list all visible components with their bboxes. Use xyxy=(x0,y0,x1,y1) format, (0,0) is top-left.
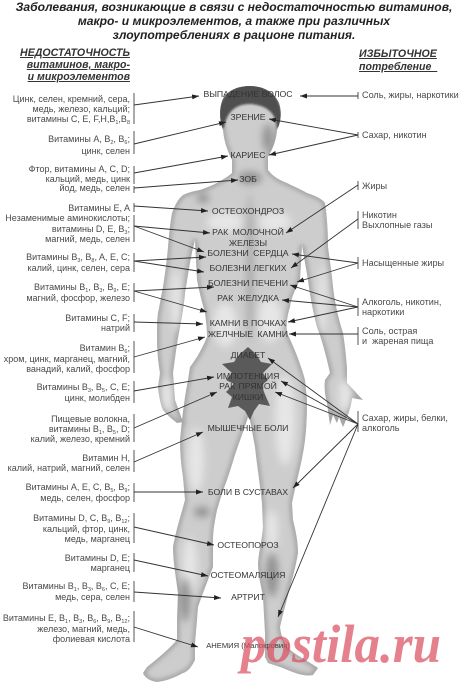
deficiency list: impotence: цинк, молибден xyxy=(65,393,130,403)
left bracket bars xyxy=(133,93,135,642)
disease labels on body: ЖЕЛЕЗЫ xyxy=(229,238,267,248)
disease labels on body: БОЛЕЗНИ СЕРДЦА xyxy=(207,248,289,258)
deficiency list: kidney stones: натрий xyxy=(101,323,130,333)
heading: deficiency: и микроэлементов xyxy=(28,71,130,83)
title: Заболевания, возникающие в связи с недостаточностью витаминов, xyxy=(16,0,452,14)
deficiency list: diabetes xyxy=(4,343,130,374)
deficiency list: vision: Витамины A, B2, B6; xyxy=(48,134,130,146)
deficiency list: arthritis: Витамины B1, B3, B6, C, E; xyxy=(23,581,130,593)
deficiency list: heart and lungs: калий, цинк, селен, сера xyxy=(28,263,130,273)
deficiency list: joints xyxy=(26,482,130,503)
deficiency list: arthritis xyxy=(23,581,130,602)
deficiency list: teeth and thyroid: кальций, медь, цинк xyxy=(46,174,130,184)
deficiency list: vision xyxy=(48,134,130,156)
arrows from deficiency column xyxy=(134,96,238,647)
excess list: nicotine and exhaust: Выхлопные газы xyxy=(362,220,432,230)
deficiency list: anemia: фолиевая кислота xyxy=(53,634,130,644)
disease labels on body: ОСТЕОХОНДРОЗ xyxy=(212,206,284,216)
deficiency list: hair: витамины C, E, F,H,B1,B8 xyxy=(27,114,130,126)
disease labels on body: БОЛЕЗНИ ПЕЧЕНИ xyxy=(208,278,288,288)
disease labels on body: БОЛЕЗНИ ЛЕГКИХ xyxy=(209,263,287,273)
deficiency list: liver: магний, фосфор, железо xyxy=(26,293,130,303)
disease labels on body: ИМПОТЕНЦИЯ xyxy=(217,371,279,381)
disease labels on body: ДИАБЕТ xyxy=(231,350,265,360)
disease labels on body: КАМНИ В ПОЧКАХ xyxy=(210,318,286,328)
disease labels on body: РАК ЖЕЛУДКА xyxy=(217,293,279,303)
deficiency list: muscle pain: калий, натрий, магний, селен xyxy=(8,463,130,473)
deficiency list: osteomalacia xyxy=(65,553,130,573)
deficiency list: osteoporosis: медь, марганец xyxy=(65,534,130,544)
excess list: salt and fried food xyxy=(362,326,434,346)
deficiency list: diabetes: Витамин B6; xyxy=(80,343,130,355)
deficiency list: muscle pain xyxy=(8,453,130,473)
hair xyxy=(217,84,282,128)
excess list: fats: Жиры xyxy=(362,181,387,191)
watermark: postila.ru xyxy=(237,614,441,674)
disease labels on body: РАК ПРЯМОЙ xyxy=(219,381,277,391)
excess list: sugar and nicotine: Сахар, никотин xyxy=(362,130,427,140)
deficiency list: anemia: железо, магний, медь, xyxy=(37,624,130,634)
heading: deficiency xyxy=(20,47,130,83)
disease labels on body: ВЫПАДЕНИЕ ВОЛОС xyxy=(203,89,293,99)
deficiency list: colon: витамины B1, B5, D; xyxy=(49,424,130,436)
heading: deficiency: НЕДОСТАТОЧНОСТЬ xyxy=(20,47,130,59)
deficiency list: muscle pain: Витамин H, xyxy=(82,453,130,463)
disease labels on body: ЖЕЛЧНЫЕ КАМНИ xyxy=(208,329,288,339)
deficiency list: hair: Цинк, селен, кремний, сера, xyxy=(13,94,130,104)
deficiency list: kidney stones xyxy=(65,313,130,333)
deficiency list: liver xyxy=(26,282,130,303)
deficiency list: hair: медь, железо, кальций; xyxy=(32,104,130,114)
deficiency list: osteochondrosis and breast: витамины D, E, B3; xyxy=(52,224,130,236)
disease labels on body: БОЛИ В СУСТАВАХ xyxy=(208,487,288,497)
deficiency list: heart and lungs xyxy=(26,252,130,273)
disease labels on body: РАК МОЛОЧНОЙ xyxy=(212,227,284,237)
excess list: salt and fried food: Соль, острая xyxy=(362,326,417,336)
heading: excess: ИЗБЫТОЧНОЕ xyxy=(359,48,437,60)
deficiency list: osteomalacia: Витамины D, E; xyxy=(65,553,130,563)
deficiency list: colon: калий, железо, кремний xyxy=(31,434,130,444)
deficiency list: arthritis: медь, сера, селен xyxy=(55,592,130,602)
deficiency list: kidney stones: Витамины C, F; xyxy=(65,313,130,323)
heading: deficiency: витаминов, макро- xyxy=(27,59,130,71)
disease labels on body: АНЕМИЯ (Малокровия) xyxy=(206,641,290,650)
deficiency list: osteochondrosis and breast: Незаменимые аминокислоты; xyxy=(5,213,130,223)
disease labels on body: АРТРИТ xyxy=(231,592,265,602)
excess list: saturated fats: Насыщенные жиры xyxy=(362,258,444,268)
deficiency list: teeth and thyroid: Фтор, витамины A, C, D; xyxy=(29,164,130,174)
deficiency list: diabetes: хром, цинк, марганец, магний, xyxy=(4,354,130,364)
deficiency list: hair xyxy=(13,94,130,126)
deficiency list: liver: Витамины B1, B3, B9, E; xyxy=(34,282,130,294)
deficiency list: impotence: Витамины B3, B5, C, E; xyxy=(37,382,130,394)
deficiency list: osteoporosis: Витамины D, C, B9, B12; xyxy=(33,513,130,525)
deficiency list: anemia: Витамины E, B1, B3, B6, B9, B12; xyxy=(3,613,130,625)
deficiency list: diabetes: ванадий, калий, фосфор xyxy=(26,364,130,374)
excess list: alcohol: Алкоголь, никотин, xyxy=(362,297,441,307)
deficiency list: impotence xyxy=(37,382,130,403)
deficiency list: heart and lungs: Витамины B3, B8, A, E, C; xyxy=(26,252,130,264)
excess list: sugar, fats, proteins, alcohol: алкоголь xyxy=(362,423,400,433)
maple leaf xyxy=(222,347,272,420)
disease labels on body: КИШКИ xyxy=(233,392,263,402)
title xyxy=(16,0,452,42)
deficiency list: joints: Витамины A, E, C, B5, B9; xyxy=(26,482,130,494)
arrows from excess column xyxy=(268,96,358,617)
disease labels on body: ОСТЕОПОРОЗ xyxy=(217,540,279,550)
disease labels on body: МЫШЕЧНЫЕ БОЛИ xyxy=(208,423,288,433)
deficiency list: osteochondrosis and breast: магний, медь, селен xyxy=(45,234,130,244)
disease labels on body: ЗРЕНИЕ xyxy=(230,112,266,122)
excess list: alcohol xyxy=(362,297,441,317)
deficiency list: osteochondrosis and breast: Витамины E, A xyxy=(68,203,130,213)
deficiency list: osteomalacia: марганец xyxy=(91,563,130,573)
deficiency list: colon: Пищевые волокна, xyxy=(51,414,130,424)
deficiency list: osteoporosis xyxy=(33,513,130,544)
human body figure xyxy=(143,84,363,682)
title: злоупотреблениях в рационе питания. xyxy=(113,28,355,42)
excess list: salt and fried food: и жареная пища xyxy=(362,336,433,346)
disease labels on body: КАРИЕС xyxy=(231,150,265,160)
excess list: nicotine and exhaust: Никотин xyxy=(362,210,397,220)
deficiency list: vision: цинк, селен xyxy=(81,146,130,156)
deficiency list: teeth and thyroid: йод, медь, селен xyxy=(60,183,130,193)
title: макро- и микроэлементов, а также при различных xyxy=(78,14,390,28)
excess list: sugar, fats, proteins, alcohol: Сахар, жиры, белки, xyxy=(362,413,448,423)
deficiency list: colon xyxy=(31,414,130,444)
deficiency list: teeth and thyroid xyxy=(29,164,130,193)
heading: excess: потребление xyxy=(359,61,431,73)
right bracket bars xyxy=(357,92,359,432)
deficiency list: joints: медь, селен, фосфор xyxy=(40,493,130,503)
deficiency list: osteochondrosis and breast xyxy=(5,203,130,244)
excess list: alcohol: наркотики xyxy=(362,307,404,317)
deficiency list: anemia xyxy=(3,613,130,644)
deficiency list: osteoporosis: кальций, фтор, цинк, xyxy=(43,524,130,534)
heading: excess xyxy=(359,48,438,73)
disease labels on body: ОСТЕОМАЛЯЦИЯ xyxy=(211,570,285,580)
disease labels on body: ЗОБ xyxy=(239,174,257,184)
excess list: nicotine and exhaust xyxy=(362,210,432,230)
excess list: sugar, fats, proteins, alcohol xyxy=(362,413,448,433)
excess list: hair: Соль, жиры, наркотики xyxy=(362,90,459,100)
